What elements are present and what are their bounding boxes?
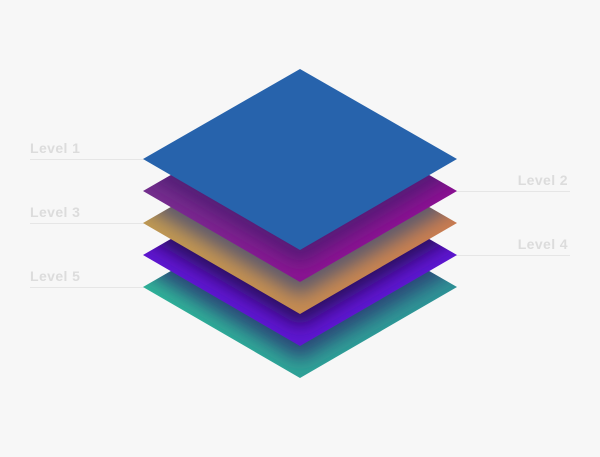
label: Level 1	[30, 140, 144, 160]
label: Level 5: Level 5	[30, 268, 80, 284]
layer 4: violet	[143, 239, 457, 346]
layer 2: purple	[143, 175, 457, 282]
label: Level 3	[30, 204, 144, 224]
label: Level 2	[456, 172, 570, 192]
label: Level 4: Level 4	[518, 236, 568, 252]
label: Level 1: Level 1	[30, 140, 80, 156]
layer 3: orange	[143, 207, 457, 314]
label: Level 2: Level 2	[518, 172, 568, 188]
layer 1: blue top	[143, 69, 457, 250]
label: Level 3: Level 3	[30, 204, 80, 220]
label: Level 4	[456, 236, 570, 256]
layer 5: teal	[143, 271, 457, 378]
label: Level 5	[30, 268, 144, 288]
